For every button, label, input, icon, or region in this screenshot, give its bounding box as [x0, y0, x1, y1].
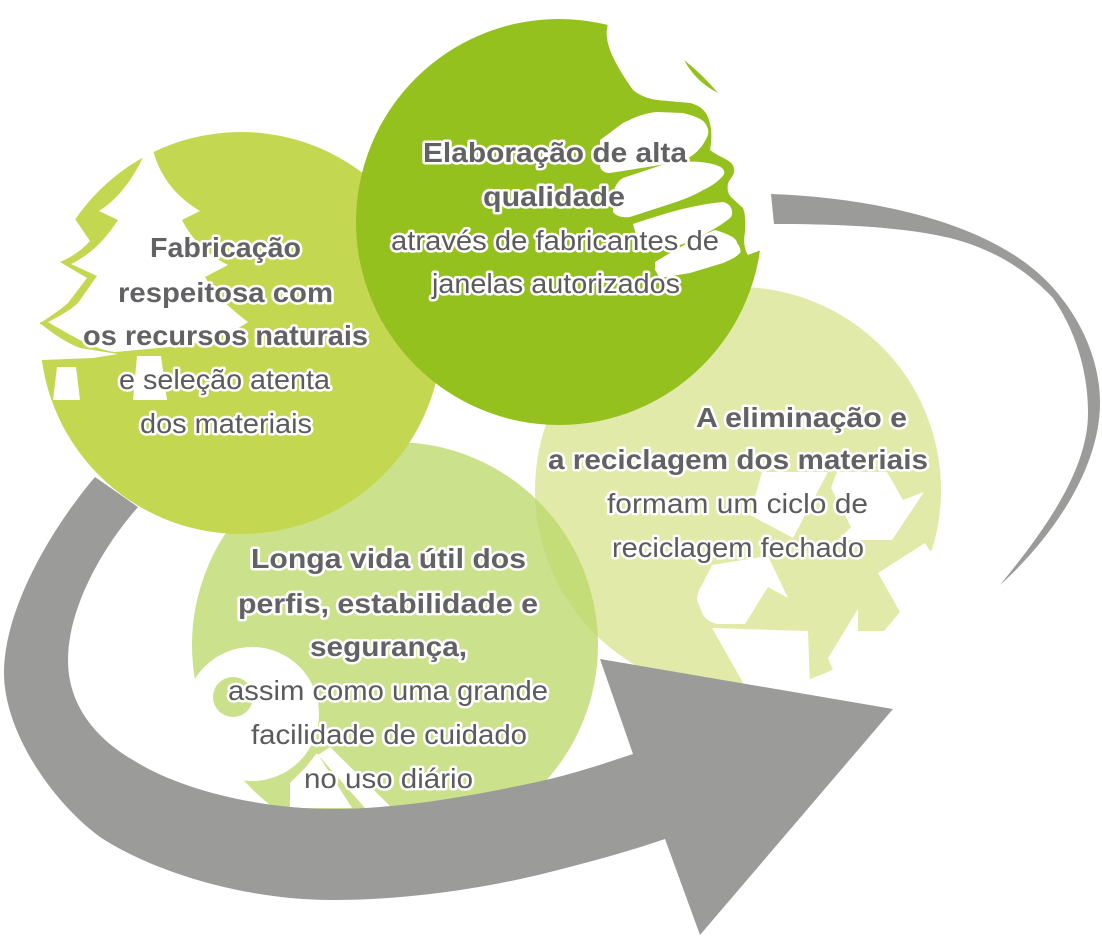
text: recycling: formam um ciclo de — [607, 488, 868, 519]
panel: long life — [185, 442, 598, 848]
text: long life: assim como uma grande — [228, 675, 548, 706]
icon: spanner — [185, 647, 392, 810]
text: recycling: A eliminação e — [696, 402, 907, 433]
text: manufacturing — [83, 232, 368, 439]
text: long life: Longa vida útil dos — [251, 543, 526, 574]
circle: recycling — [535, 287, 941, 693]
panel: recycling — [535, 287, 960, 700]
text: long life — [228, 543, 548, 794]
text: recycling: reciclagem fechado — [612, 532, 864, 563]
text: manufacturing: respeitosa com — [118, 277, 333, 308]
circle: production — [356, 19, 762, 425]
text: recycling: a reciclagem dos materiais — [548, 444, 928, 475]
icon: fir tree — [0, 130, 248, 400]
text: manufacturing: Fabricação — [150, 232, 301, 263]
arrow: large grey cycle arrow — [4, 477, 893, 935]
arrow: thin grey return arc — [771, 194, 1100, 585]
icon: thumb sliver — [684, 60, 718, 93]
icon: hand — [600, 0, 785, 278]
text: recycling — [548, 402, 928, 563]
text: production: Elaboração de alta — [423, 137, 687, 168]
text: manufacturing: e seleção atenta — [119, 364, 330, 395]
panel: resource-friendly manufacturing — [0, 130, 442, 534]
text: long life: no uso diário — [304, 763, 473, 794]
circle: long life — [192, 442, 598, 848]
panel: high-quality production — [356, 0, 785, 425]
text: production: qualidade — [483, 181, 625, 212]
text: long life: facilidade de cuidado — [251, 719, 527, 750]
text: long life: perfis, estabilidade e — [238, 588, 538, 619]
text: production: através de fabricantes de — [391, 225, 719, 256]
text: production: janelas autorizados — [431, 268, 680, 299]
icon: recycling symbol — [697, 472, 960, 700]
text: manufacturing: dos materiais — [140, 408, 312, 439]
circle: manufacturing — [40, 132, 442, 534]
text: production — [391, 137, 719, 299]
text: long life: segurança, — [310, 631, 467, 662]
text: manufacturing: os recursos naturais — [83, 320, 368, 351]
